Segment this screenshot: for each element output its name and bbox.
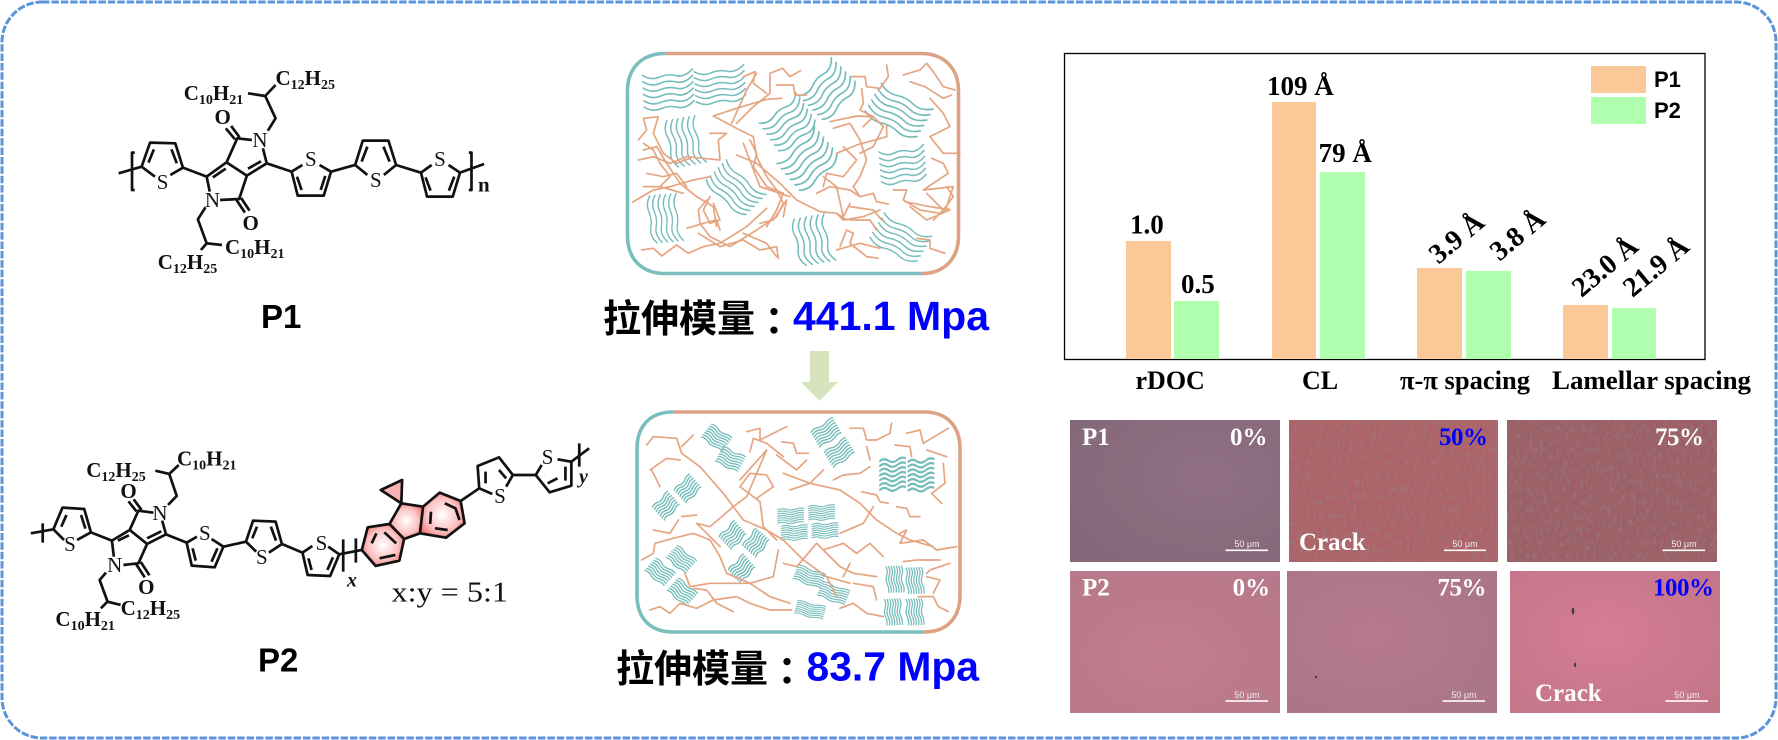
chemical structure: P2: C bbox=[177, 447, 192, 471]
micrograph: P2 75%: 75% bbox=[1438, 575, 1486, 602]
category labels: rDOC bbox=[1136, 366, 1205, 395]
micrograph: P1 0% bbox=[1070, 420, 1280, 562]
chemical structure: P2: 21 bbox=[223, 459, 237, 474]
crystalline bundles bbox=[644, 417, 934, 626]
micrograph: P2 0% bbox=[1070, 571, 1280, 713]
amorphous chains bbox=[632, 63, 960, 258]
bars: pi-pi spacing bbox=[1417, 268, 1511, 359]
chemical structure: P2: S bbox=[64, 532, 76, 556]
amorphous chains bbox=[642, 423, 957, 617]
modulus text: P1: ： bbox=[755, 302, 793, 344]
modulus text: P2: 83.7 Mpa bbox=[806, 644, 980, 690]
chemical structure: P1: H bbox=[254, 235, 271, 259]
micrograph: P1 0%: 50 μm bbox=[1234, 539, 1260, 549]
chemical structure: P1: C bbox=[158, 250, 173, 274]
chemical structure: P2: N bbox=[152, 501, 168, 525]
chemical structure: P1: C bbox=[276, 66, 291, 90]
micrograph: P1 0%: P1 bbox=[1082, 424, 1110, 451]
crystalline bundles bbox=[642, 58, 933, 267]
chemical structure: P1: S bbox=[370, 168, 382, 192]
micrograph: P1 0%: 0% bbox=[1230, 424, 1268, 451]
chemical structure: P1: 21 bbox=[229, 93, 243, 108]
bars: lamellar spacing bbox=[1563, 305, 1656, 359]
micrograph: P2 0%: P2 bbox=[1082, 575, 1110, 602]
chemical structure: P1: 25 bbox=[203, 262, 217, 277]
category labels: Lamellar spacing bbox=[1552, 366, 1751, 395]
legend: P1 bbox=[1654, 67, 1681, 92]
bar chart bbox=[1064, 54, 1751, 395]
micrograph: P2 75%: 50 μm bbox=[1451, 690, 1477, 700]
chemical structure: P2: H bbox=[150, 596, 166, 620]
chemical structure: P1: S bbox=[434, 147, 446, 171]
chemical structure: P2: 12 bbox=[136, 608, 150, 623]
modulus text: P2 bbox=[616, 644, 980, 694]
bars: CL bbox=[1272, 102, 1365, 359]
chemical structure: P1: S bbox=[305, 147, 317, 171]
chemical structure: P2: O bbox=[120, 479, 137, 503]
micrograph: P1 75%: 75% bbox=[1655, 424, 1704, 451]
chemical structure: P2: S bbox=[256, 545, 268, 569]
value labels: 109 Å bbox=[1267, 71, 1334, 101]
chemical structure: P1: 12 bbox=[291, 78, 305, 93]
value labels: 3.8 Å bbox=[1484, 203, 1552, 267]
chemical structure: P2: 10 bbox=[71, 619, 85, 634]
micrograph: P1 50%: 50 μm bbox=[1452, 539, 1478, 549]
chemical structure: P1: 12 bbox=[173, 262, 187, 277]
value labels: 23.0 Å bbox=[1566, 230, 1645, 303]
chemical structure: P1: H bbox=[187, 250, 203, 274]
chemical structure: P2: S bbox=[494, 484, 506, 508]
label: P1: P1 bbox=[261, 298, 301, 335]
chemical structure: P2: 10 bbox=[192, 459, 206, 474]
chart frame bbox=[1064, 54, 1705, 360]
chemical structure: P2: O bbox=[138, 575, 154, 599]
chemical structure: P2: S bbox=[316, 531, 327, 555]
modulus text: P1 bbox=[603, 293, 990, 344]
micrograph: P2 0%: 0% bbox=[1233, 575, 1270, 602]
micrograph: P2 100%: Crack bbox=[1535, 680, 1602, 707]
chemical structure: P2: 21 bbox=[101, 619, 115, 634]
micrograph: P1 75%: 50 μm bbox=[1671, 539, 1697, 549]
value labels: 79 Å bbox=[1319, 138, 1372, 168]
chemical structure: P1: N bbox=[205, 188, 220, 212]
chemical structure: P2: 12 bbox=[101, 470, 115, 485]
chemical structure: P2: x bbox=[346, 570, 357, 592]
bars: rDOC bbox=[1126, 241, 1219, 359]
value labels: 3.9 Å bbox=[1423, 206, 1491, 270]
chemical structure: P1: 10 bbox=[199, 93, 213, 108]
micrograph: P2 100% bbox=[1510, 571, 1720, 713]
fluorene highlight rings bbox=[362, 480, 465, 566]
chemical structure: P1: 25 bbox=[321, 78, 335, 93]
chemical structure: P1 bbox=[119, 66, 490, 277]
legend: P2 bbox=[1654, 98, 1681, 123]
box outline bbox=[628, 54, 958, 274]
category labels: π-π spacing bbox=[1400, 366, 1530, 395]
micrograph: P2 75% bbox=[1287, 571, 1497, 713]
chemical structure: P2: y bbox=[577, 466, 588, 488]
chemical structure: P1: 10 bbox=[240, 247, 254, 262]
arrow: downward bbox=[801, 351, 838, 401]
panel: morphology P2 bbox=[637, 412, 960, 632]
panel: morphology P1 bbox=[628, 54, 960, 274]
chemical structure: P2: 25 bbox=[132, 470, 146, 485]
chemical structure: P2: C bbox=[86, 458, 101, 482]
ratio text: x:y = 5:1 bbox=[392, 578, 508, 609]
chemical structure: P1: H bbox=[305, 66, 321, 90]
micrograph: P1 50% bbox=[1289, 420, 1498, 562]
legend bbox=[1591, 66, 1681, 124]
micrograph: P2 0%: 50 μm bbox=[1234, 690, 1260, 700]
chemical structure: P2: S bbox=[199, 521, 211, 545]
micrograph: P1 50%: Crack bbox=[1299, 529, 1366, 556]
chemical structure: P1: S bbox=[157, 170, 168, 194]
category labels bbox=[1136, 366, 1751, 395]
value labels: 21.9 Å bbox=[1617, 230, 1696, 303]
chemical structure: P2: C bbox=[121, 596, 136, 620]
chemical structure: P2: H bbox=[206, 447, 223, 471]
chemical structure: P2 bbox=[31, 443, 589, 634]
chemical structure: P2: H bbox=[115, 458, 132, 482]
value labels bbox=[1130, 71, 1696, 303]
chemical structure: P2: 25 bbox=[166, 608, 180, 623]
category labels: CL bbox=[1302, 366, 1338, 395]
chemical structure: P1: C bbox=[225, 235, 240, 259]
micrograph: P1 75% bbox=[1507, 420, 1717, 562]
chemical structure: P1: O bbox=[243, 211, 259, 235]
micrograph: P2 100%: 50 μm bbox=[1674, 690, 1700, 700]
micrograph: P1 50%: 50% bbox=[1439, 424, 1488, 451]
label: P2: P2 bbox=[258, 642, 298, 679]
value labels: 1.0 bbox=[1130, 210, 1164, 240]
box outline bbox=[637, 412, 960, 632]
chemical structure: P1: N bbox=[252, 128, 268, 152]
modulus text: P2: ： bbox=[768, 652, 806, 694]
chemical structure: P1: 21 bbox=[271, 247, 285, 262]
micrograph: P2 100%: 100% bbox=[1653, 575, 1714, 602]
chemical structure: P2: C bbox=[55, 607, 71, 631]
chemical structure: P1: O bbox=[215, 105, 231, 129]
chemical structure: P2: S bbox=[542, 445, 553, 469]
modulus text: P1: 441.1 Mpa bbox=[793, 293, 990, 339]
chemical structure: P1: C bbox=[184, 81, 199, 105]
chemical structure: P1: H bbox=[213, 81, 229, 105]
value labels: 0.5 bbox=[1181, 269, 1215, 299]
chemical structure: P2: H bbox=[85, 607, 101, 631]
modulus text: P1: 拉伸模量 bbox=[603, 299, 755, 341]
chemical structure: P2: N bbox=[107, 553, 122, 577]
modulus text: P2: 拉伸模量 bbox=[616, 649, 768, 691]
chemical structure: P1: n bbox=[478, 172, 490, 196]
